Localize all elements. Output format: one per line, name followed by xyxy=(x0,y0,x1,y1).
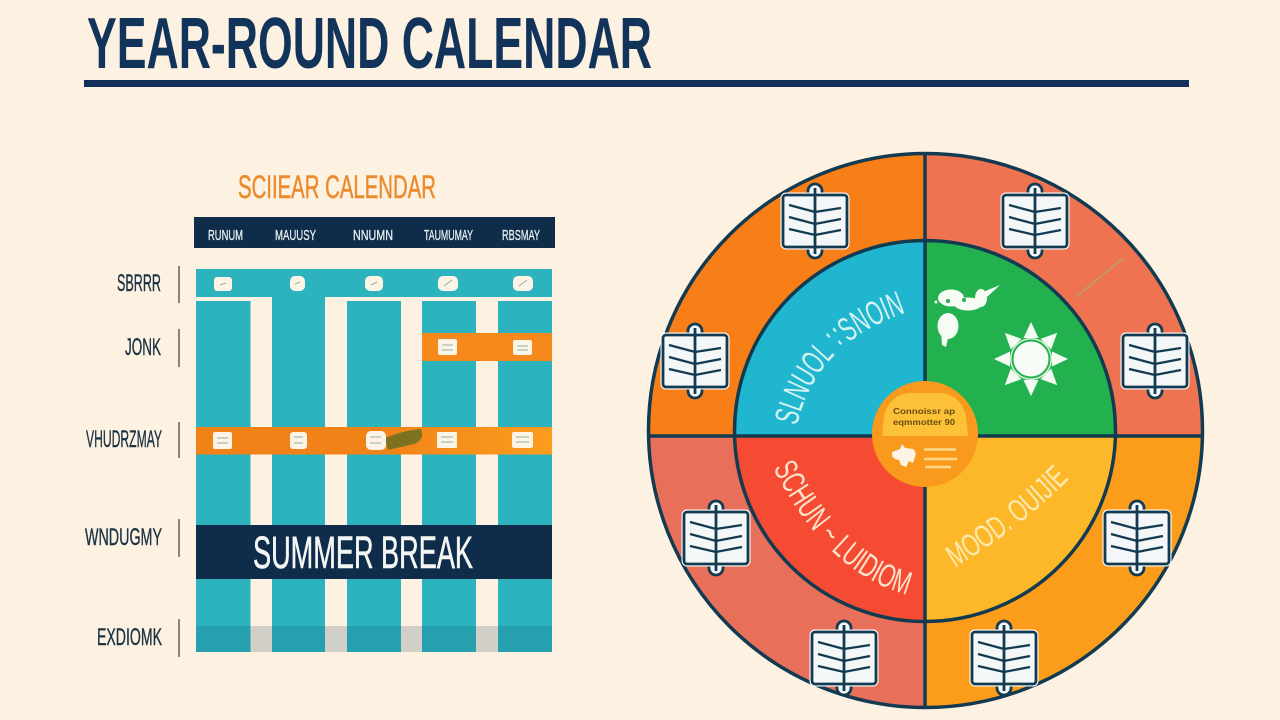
inner quadrant: mood online: MOOD. OUIJIE xyxy=(944,464,1068,568)
bottom shaded row xyxy=(196,626,552,652)
icon: book 6 xyxy=(812,621,876,695)
icon: book 2 xyxy=(663,324,727,398)
row labels: EXDIOMK xyxy=(97,624,162,651)
hub text xyxy=(893,407,956,427)
row labels: JONK xyxy=(125,334,161,361)
wheel outlines xyxy=(648,153,1203,708)
icon: book 3 xyxy=(1003,184,1067,258)
header bar with column labels: RUNUM xyxy=(208,227,243,244)
hub lines xyxy=(924,450,957,467)
center hub xyxy=(872,381,978,487)
outer ring quadrants xyxy=(648,153,1203,708)
title rule xyxy=(84,80,1189,87)
header bar with column labels: TAUMUMAY xyxy=(424,227,473,244)
header bar with column labels: RBSMAY xyxy=(502,227,540,244)
inner quadrant: summer xyxy=(925,240,1115,436)
panel: season wheel xyxy=(646,152,1204,710)
icon: book 1 xyxy=(783,184,847,258)
title: YEAR-ROUND CALENDAR xyxy=(87,4,652,84)
cell icon marks xyxy=(217,280,529,443)
panel: school calendar xyxy=(85,169,555,657)
row labels: VHUDRZMAY xyxy=(86,426,162,453)
header bar with column labels: NNUMN xyxy=(353,227,393,244)
inner quadrant: summer lunch xyxy=(736,438,924,620)
row labels: WNDUGMY xyxy=(85,524,162,551)
icon: book 8 xyxy=(972,621,1036,695)
hub text: Connoissr ap xyxy=(893,407,955,416)
summer break band xyxy=(196,525,552,579)
teal column grid xyxy=(196,269,552,652)
inner quadrant: school session xyxy=(736,242,924,434)
header bar with column labels xyxy=(194,217,555,248)
orange row: june xyxy=(422,333,552,361)
row labels xyxy=(85,270,162,651)
cell icons xyxy=(213,276,533,450)
hub label panel xyxy=(882,393,968,436)
icon: splash shape xyxy=(934,285,1000,347)
icon: book 4 xyxy=(1123,324,1187,398)
faint ring mark xyxy=(1076,258,1123,297)
calendar heading: SCIIEAR CALENDAR xyxy=(238,169,436,205)
inner quadrant: mood online xyxy=(926,438,1114,620)
icon: piggy xyxy=(892,444,916,467)
marker smear xyxy=(385,429,422,450)
row tick marks xyxy=(178,266,180,657)
inner quadrant: summer lunch: SCHUN ~ LUIDIOM xyxy=(775,460,912,594)
icon: book 5 xyxy=(684,501,748,575)
hub text: eqmmotter 90 xyxy=(893,418,956,427)
summer break band: SUMMER BREAK xyxy=(253,527,473,578)
icon: sun xyxy=(994,322,1068,396)
orange row: wednesday xyxy=(196,427,552,454)
inner quadrant: school session: SLNUOL ∵SNOIN xyxy=(775,291,904,424)
row labels: SBRRR xyxy=(117,270,161,297)
icon: book 7 xyxy=(1105,501,1169,575)
header bar with column labels: MAUUSY xyxy=(275,227,316,244)
